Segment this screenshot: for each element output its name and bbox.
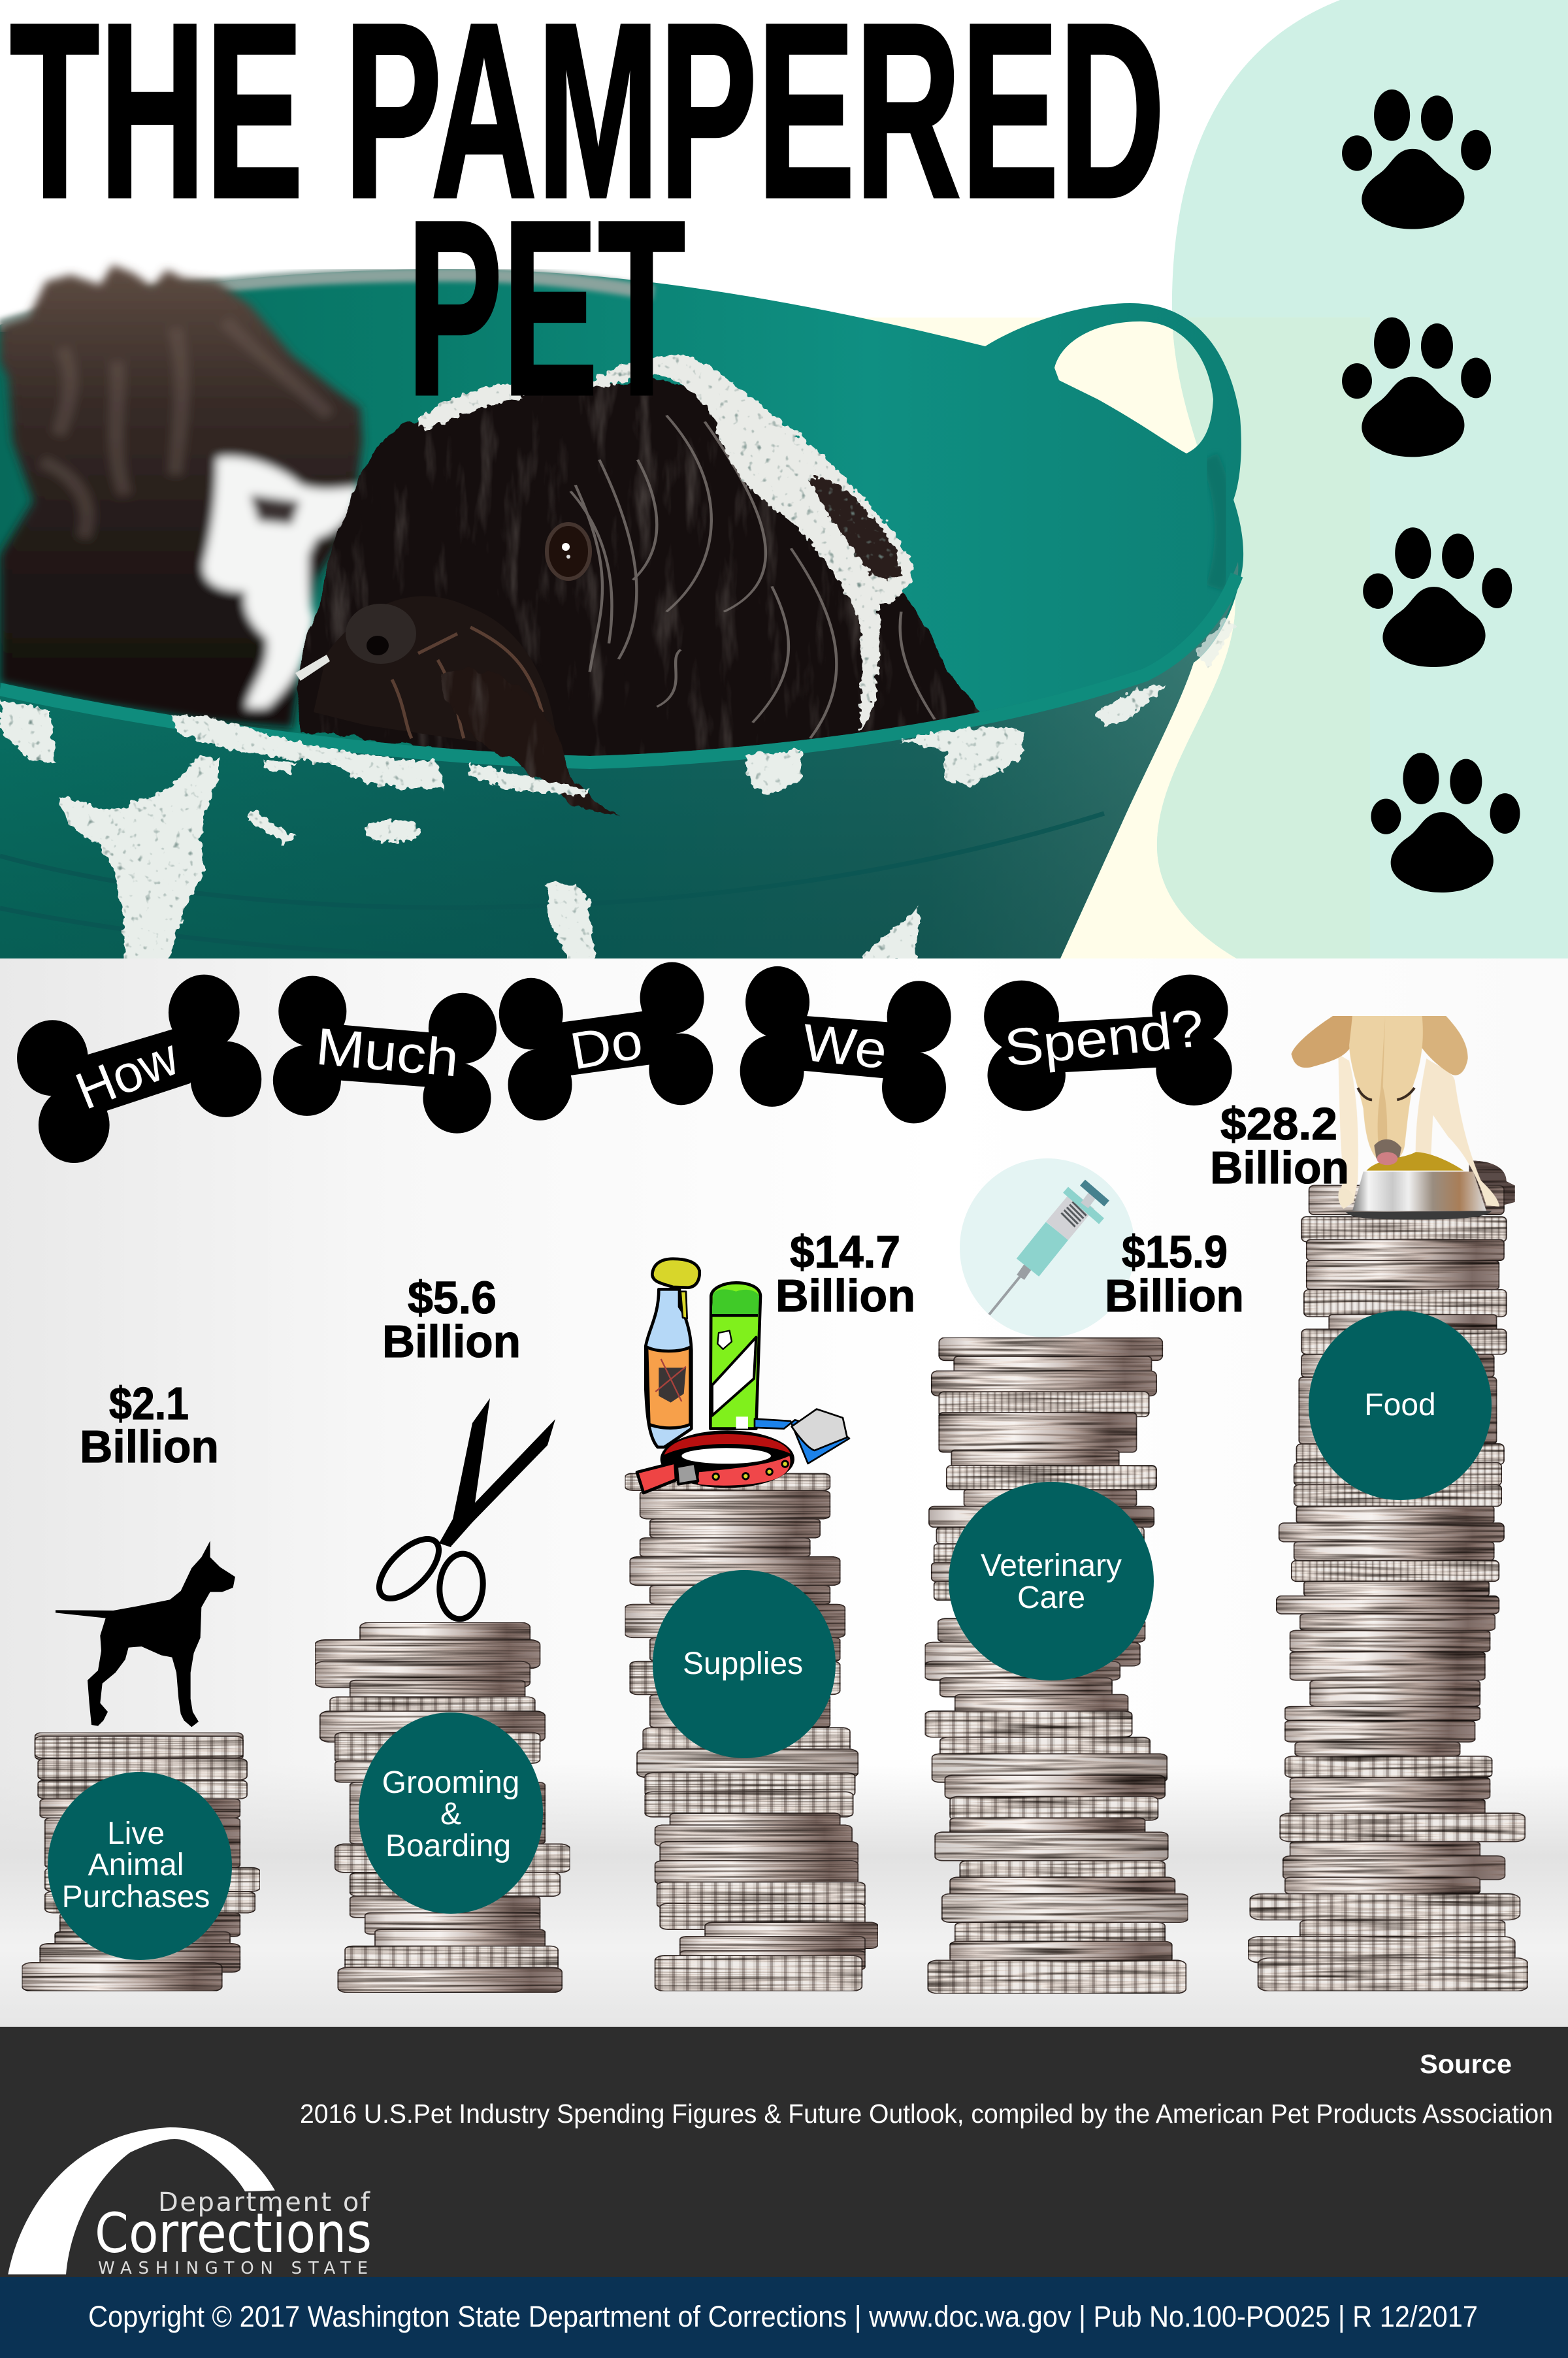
coin stack: live animal purchases [22,1733,260,1991]
icon: dog eating from bowl [1292,1016,1499,1220]
label circle: veterinary care [949,1482,1154,1680]
panel: footer source [0,2027,1568,2277]
muzzle and nose [295,596,555,745]
soap foam on bucket [0,619,1235,960]
label circle: live animal purchases: Animal [88,1848,184,1882]
bucket back wall [0,269,1243,960]
title line 2: PET [407,169,685,447]
label circle: supplies [653,1570,836,1758]
icon: paw 1 [1342,90,1491,229]
bone: Spend?: Spend? [1002,998,1207,1077]
coin stack: veterinary care [925,1337,1188,1993]
amount: $2.1 Billion: Billion [80,1421,219,1472]
panel: spending chart background [0,958,1568,2027]
icon: shampoo can [710,1283,760,1429]
label circle: grooming and boarding [359,1712,543,1914]
label circle: veterinary care: Care [1017,1580,1085,1615]
amount: $28.2 Billion: Billion [1210,1142,1349,1193]
coin stack: food [1248,1160,1528,1991]
amount: $28.2 Billion: $28.2 [1220,1098,1337,1149]
amount: $2.1 Billion [80,1378,219,1472]
logo text: Washington State: WASHINGTON STATE [98,2259,368,2278]
amount: $15.9 Billion [1105,1226,1244,1321]
wet fringe over the rim [444,670,619,816]
icon: syringe [960,1158,1135,1337]
mint blob [1150,0,1568,960]
coin stack: supplies [625,1473,878,1991]
copyright text: Copyright © 2017 Washington State Department of Corrections | www.doc.wa.gov | Pub No.100-PO025 | R 12/2017 [88,2300,1478,2333]
label circle: grooming and boarding: & [440,1797,461,1831]
amount: $28.2 Billion [1210,1098,1349,1193]
icon: paw 3 [1363,527,1512,667]
icon: red collar [637,1430,794,1493]
icon: scissors [369,1398,555,1621]
icon: paw 2 [1342,318,1491,457]
panel: hero photo [0,0,1568,960]
bucket front wall [0,562,1238,960]
label circle: veterinary care: Veterinary [981,1548,1122,1583]
source heading: Source [1420,2049,1512,2079]
eye [547,524,590,579]
bone: Do [499,962,713,1121]
amount: $5.6 Billion: Billion [382,1316,521,1367]
bone: We: We [800,1013,890,1079]
amount: $14.7 Billion [776,1226,915,1321]
label circle: grooming and boarding: Boarding [385,1829,511,1863]
icon: flea spray, shampoo, collar and brush [637,1259,849,1493]
logo text: Department of: Department of [158,2187,370,2218]
amount: $14.7 Billion: Billion [776,1270,915,1321]
heading: How Much Do We Spend? bones [17,962,1232,1163]
foam on the head [418,355,913,732]
label circle: food: Food [1364,1388,1436,1422]
bone: Much: Much [314,1017,461,1087]
bone: Much [273,976,497,1134]
label circle: supplies: Supplies [683,1646,803,1681]
front dog head [291,355,987,764]
logo text: Corrections: Corrections [95,2201,372,2265]
bone: We [740,966,951,1123]
bone: How [17,975,261,1163]
label circle: live animal purchases [48,1772,232,1960]
amount: $14.7 Billion: $14.7 [790,1226,900,1277]
icon: paw 4 [1371,753,1520,892]
bone: How: How [68,1027,186,1121]
amount: $5.6 Billion [382,1272,521,1367]
icon: blue tray and sponge [755,1409,849,1464]
label circle: live animal purchases: Live [107,1816,165,1851]
title [10,0,1165,447]
logo: Department of Corrections [8,2127,372,2278]
label circle: food [1309,1311,1492,1500]
back dog, out of focus [0,265,363,728]
paw prints column [1342,90,1520,892]
icon: spray bottle [645,1259,700,1447]
amount: $15.9 Billion: $15.9 [1122,1226,1228,1277]
amount: $5.6 Billion: $5.6 [408,1272,497,1323]
icon: dog silhouette [56,1541,235,1727]
amount: $15.9 Billion: Billion [1105,1270,1244,1321]
panel: copyright bar [0,2277,1568,2358]
coin stack: grooming and boarding [315,1622,570,1993]
bone: Do: Do [566,1011,647,1081]
hair strands [570,416,935,738]
bone: Spend? [984,975,1232,1111]
amount: $2.1 Billion: $2.1 [109,1378,189,1429]
label circle: live animal purchases: Purchases [62,1880,210,1914]
cream backdrop [860,318,1236,958]
label circle: grooming and boarding: Grooming [382,1765,519,1800]
